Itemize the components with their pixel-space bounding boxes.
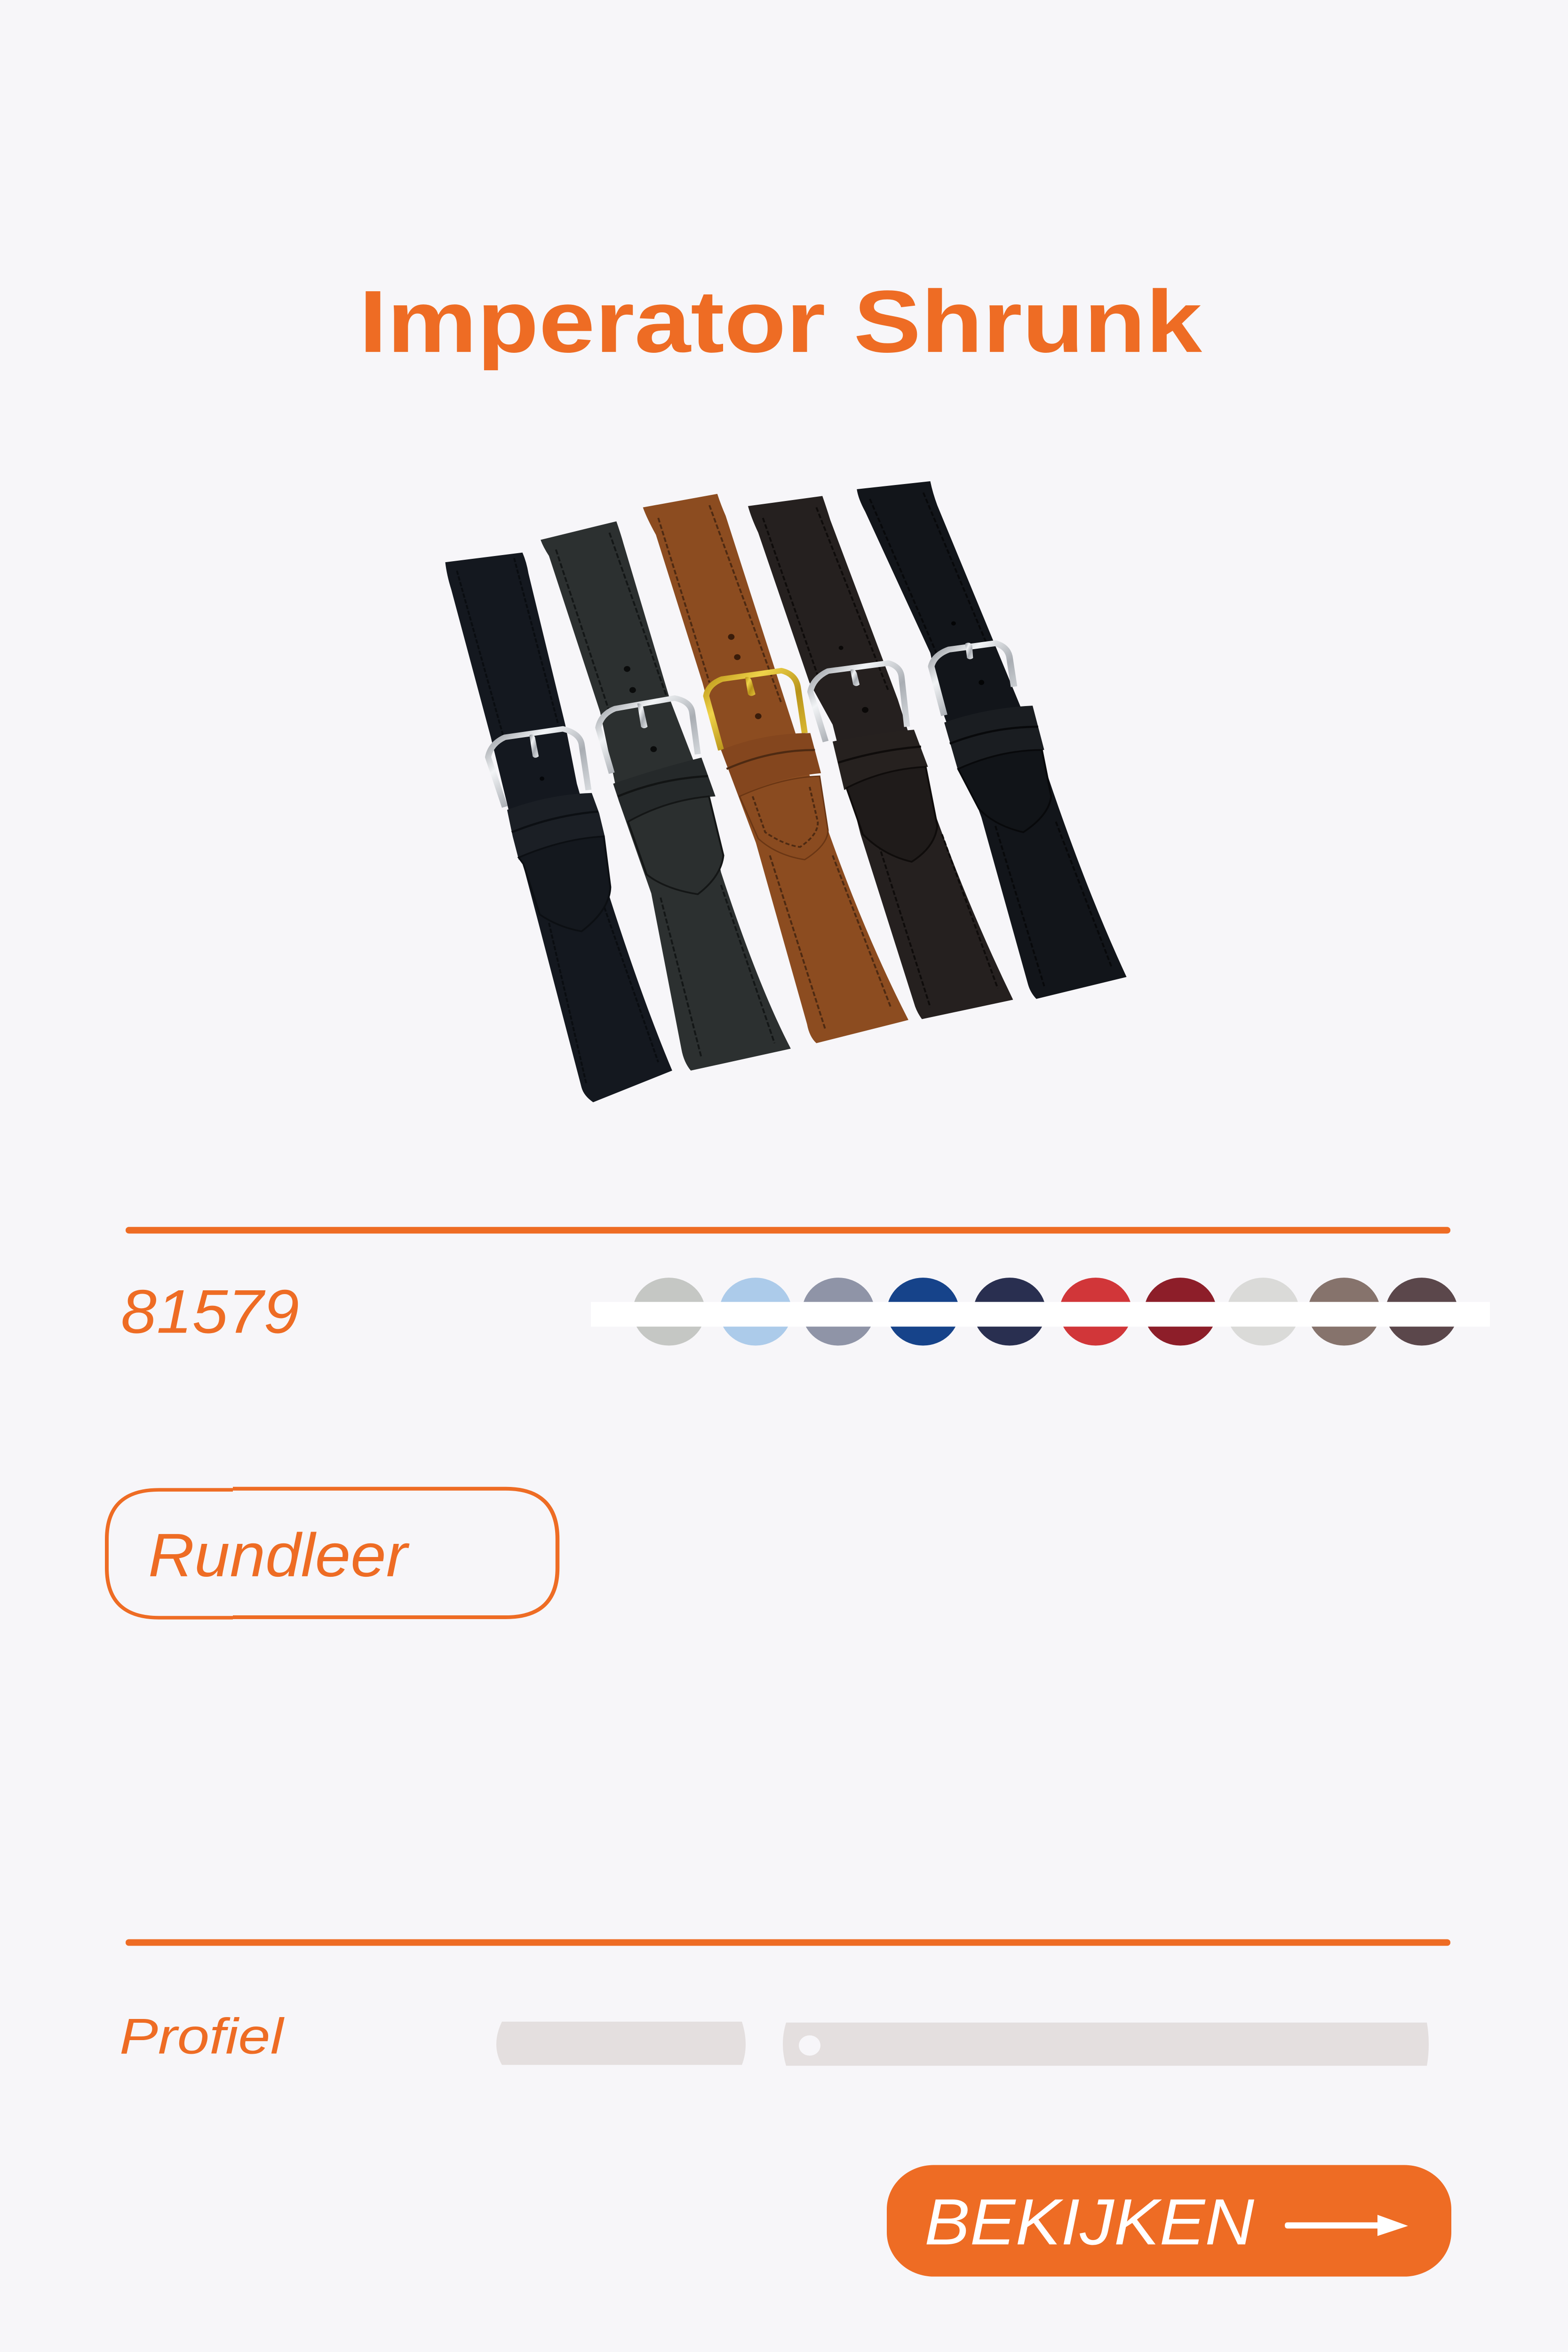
strap profile diagram: long piece with hole <box>783 2023 1429 2066</box>
strap 1: black <box>445 553 672 1102</box>
strap 5: black <box>857 481 1127 999</box>
button: bekijken <box>887 2165 1451 2277</box>
title: Imperator Shrunk <box>359 273 1202 371</box>
divider: top rule <box>126 1227 1450 1233</box>
profile label: Profiel <box>119 2009 285 2064</box>
white band across swatches <box>591 1302 1490 1327</box>
strap 4: dark brown <box>748 496 1013 1019</box>
article number: 81579 <box>121 1277 299 1346</box>
icon: arrow <box>1285 2215 1408 2236</box>
product photo: five leather watch straps <box>445 481 1127 1102</box>
material tag: Rundleer: Rundleer <box>148 1521 410 1589</box>
material tag: Rundleer <box>107 1489 557 1618</box>
strap 3: brown <box>643 494 908 1043</box>
strap profile diagram: short piece <box>496 2022 746 2065</box>
colour swatches <box>591 1278 1490 1345</box>
divider: lower rule <box>126 1939 1450 1946</box>
button: bekijken: BEKIJKEN <box>924 2185 1254 2258</box>
strap 2: dark grey <box>541 521 791 1071</box>
